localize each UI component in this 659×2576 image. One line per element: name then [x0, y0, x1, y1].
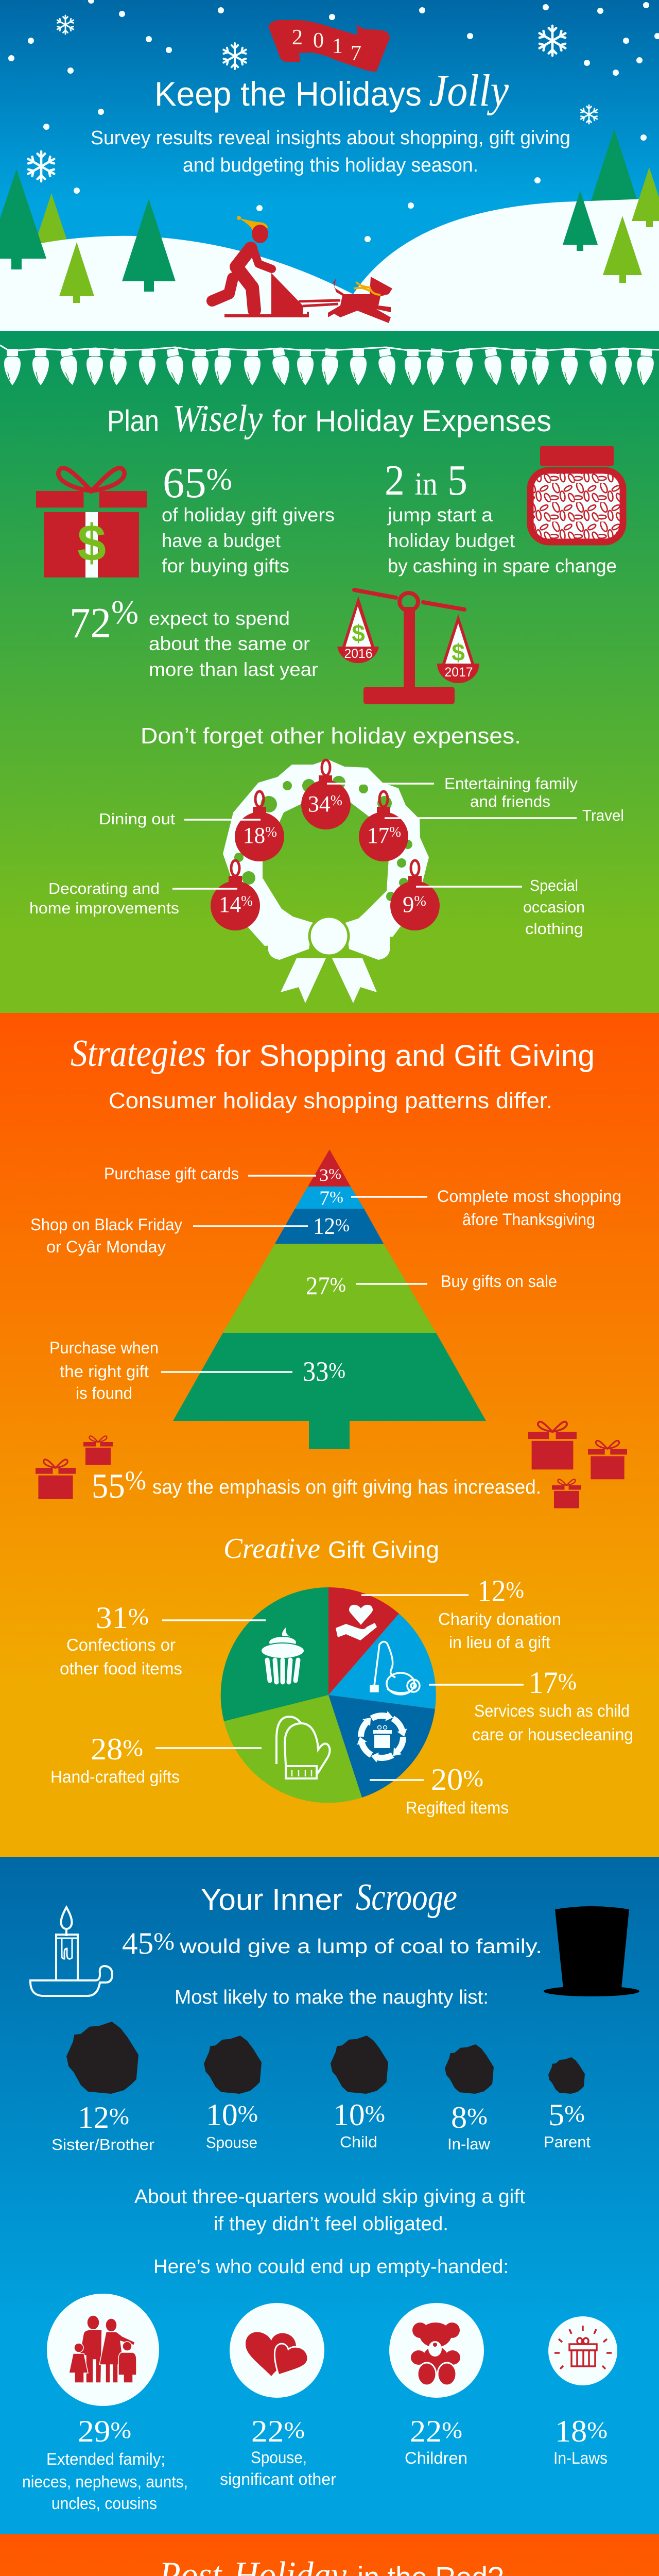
- stat: spouse: 10: [206, 2098, 237, 2132]
- icons: small gifts: [36, 1422, 627, 1508]
- ornament: 14 percent: 14: [219, 892, 241, 917]
- stat: in-law: 8: [451, 2100, 466, 2134]
- stat: 2 in 5: jump start a: [387, 504, 493, 526]
- stat: 72 percent: about the same or: [149, 633, 310, 654]
- label: dining out: Dining out: [99, 810, 175, 828]
- panel: inner scrooge: [0, 1857, 659, 2534]
- wreath bow: [268, 912, 390, 1003]
- label: special occasion: [523, 876, 585, 938]
- label: entertaining: [444, 774, 578, 810]
- icon: coin jar: [530, 446, 623, 542]
- icon: regift recycle ring: [355, 1711, 409, 1762]
- subheading: Don’t forget other holiday expenses.: [141, 723, 521, 749]
- stat: sister brother: Sister/Brother: [51, 2136, 154, 2154]
- ornament: 14 percent: %: [241, 893, 253, 909]
- heading: [201, 1876, 457, 1919]
- stat: extended family: %: [110, 2417, 131, 2443]
- label: 20 percent regifted: [406, 1762, 509, 1817]
- ornament: 18 percent: [235, 791, 284, 861]
- pyramid tree chart: [161, 1149, 486, 1449]
- ornament: 18 percent: %: [265, 824, 277, 840]
- stat: 65 percent have a budget: 65: [163, 459, 206, 507]
- stat: spouse: Spouse: [206, 2133, 257, 2151]
- stat: spouse significant other: Spouse,: [251, 2448, 307, 2467]
- label: complete most shopping before thanksgiving: Complete most shopping: [437, 1187, 621, 1206]
- stat: 45 percent: would give a lump of coal to family.: [179, 1936, 542, 1958]
- heading: [159, 2554, 504, 2576]
- label: 31 percent confections: Confections or: [66, 1635, 176, 1654]
- label: purchase when right gift found: the right gift: [60, 1362, 149, 1381]
- ornament: 14 percent: [211, 860, 260, 930]
- panel: header with sky: [0, 0, 659, 331]
- stat: extended family: nieces, nephews, aunts,: [22, 2472, 188, 2491]
- stat: child: Child: [340, 2133, 377, 2151]
- string of lights: [0, 345, 659, 386]
- stat: 45 percent: [122, 1926, 542, 1960]
- stat: children: Children: [405, 2449, 467, 2467]
- wreath with ornaments: [172, 759, 577, 1003]
- heading: Your Inner: [201, 1883, 342, 1917]
- icon: balance scale 2016 vs 2017: $: [452, 639, 465, 666]
- stat: 72 percent: expect to spend: [149, 608, 290, 629]
- snowy hills: [0, 198, 659, 331]
- pyramid tree chart: %: [330, 1273, 346, 1296]
- stat: in-laws: [553, 2414, 608, 2467]
- label: 17 percent services: care or housecleaning: [472, 1725, 633, 1744]
- subheading: Here’s who could end up empty-handed:: [153, 2256, 509, 2278]
- title: [154, 66, 509, 116]
- pyramid tree chart: %: [330, 1188, 343, 1206]
- icon circle: gift with rays: [548, 2316, 617, 2385]
- label: 12 percent charity: Charity donation: [438, 1609, 561, 1629]
- heading: [107, 398, 551, 440]
- stat: 72 percent: [70, 594, 318, 680]
- label: 17 percent services: [472, 1666, 633, 1744]
- heading: Plan: [107, 404, 159, 438]
- icon: top hat: [544, 1906, 639, 1996]
- label: special occasion: clothing: [525, 920, 583, 938]
- trees on snow: [0, 167, 659, 303]
- coal lumps: [66, 2022, 585, 2094]
- label: 12 percent charity: [438, 1574, 561, 1652]
- icon circle: hearts: [230, 2303, 324, 2398]
- stat: 65 percent have a budget: for buying gifts: [162, 555, 289, 577]
- label: purchase when right gift found: [49, 1338, 159, 1402]
- label: 17 percent services: 17: [529, 1666, 560, 1700]
- ribbon banner with year: 2017: [292, 26, 361, 65]
- label: black friday cyber monday: Shop on Black Friday: [30, 1215, 182, 1234]
- text: three quarters would skip: if they didn’t feel obligated.: [214, 2213, 448, 2235]
- pyramid tree chart: %: [335, 1215, 350, 1235]
- label: special occasion: Special: [530, 876, 578, 894]
- stat: child: [333, 2098, 385, 2151]
- stat: sister brother: 12: [78, 2100, 109, 2134]
- label: 28 percent hand-crafted: %: [123, 1735, 143, 1761]
- heading: creative gift giving: Gift Giving: [328, 1536, 439, 1563]
- icon: gift with dollar: [36, 468, 147, 578]
- stat: spouse significant other: significant other: [220, 2470, 336, 2488]
- label: complete most shopping before thanksgiving: âfore Thanksgiving: [462, 1210, 595, 1229]
- label: purchase gift cards: Purchase gift cards: [104, 1164, 239, 1183]
- pyramid tree chart: 3: [319, 1166, 328, 1185]
- pyramid tree chart: %: [328, 1359, 345, 1383]
- heading: [71, 1032, 595, 1075]
- subheading: Most likely to make the naughty list:: [175, 1987, 489, 2008]
- stat: extended family: [22, 2414, 188, 2513]
- stat: parent: [544, 2098, 591, 2151]
- stat: sister brother: [51, 2100, 154, 2154]
- ribbon banner with year: [268, 20, 390, 72]
- falling snow dots: [8, 0, 659, 242]
- label: 31 percent confections: %: [128, 1603, 149, 1630]
- heading: for Shopping and Gift Giving: [216, 1039, 595, 1073]
- stat: spouse: %: [238, 2100, 258, 2127]
- stat: 65 percent have a budget: [162, 459, 335, 577]
- stat: spouse: [206, 2098, 258, 2151]
- stat: spouse significant other: %: [284, 2417, 305, 2443]
- stat: extended family: Extended family;: [46, 2450, 165, 2468]
- panel: plan wisely: [0, 331, 659, 1013]
- heading: creative gift giving: [223, 1533, 439, 1565]
- ornament: 9 percent: %: [414, 893, 426, 909]
- heading: Wisely: [172, 398, 263, 440]
- sledding figure with dog: [212, 216, 392, 323]
- subtitle: and budgeting this holiday season.: [183, 155, 478, 176]
- label: 31 percent confections: other food items: [60, 1659, 182, 1678]
- stat: spouse significant other: [220, 2414, 336, 2488]
- stat: 55 percent: %: [125, 1466, 146, 1496]
- stat: in-law: In-law: [447, 2135, 491, 2153]
- ornament: 17 percent: 17: [367, 823, 390, 848]
- label: buy gifts on sale: Buy gifts on sale: [441, 1272, 557, 1291]
- label: 12 percent charity: 12: [477, 1574, 508, 1608]
- stat: sister brother: %: [109, 2103, 129, 2129]
- stat: spouse significant other: 22: [251, 2414, 282, 2448]
- stat: child: %: [365, 2100, 385, 2127]
- stat: in-laws: In-Laws: [553, 2449, 608, 2467]
- stat: 65 percent have a budget: %: [206, 462, 232, 496]
- panel: post-holiday: [0, 2534, 659, 2576]
- icon circle: family: [47, 2294, 159, 2406]
- label: 20 percent regifted: 20: [431, 1762, 462, 1797]
- icon: mitten: [276, 1717, 330, 1778]
- label: special occasion: occasion: [523, 898, 585, 916]
- heading: creative gift giving: Creative: [223, 1533, 320, 1565]
- stat: 65 percent have a budget: have a budget: [162, 530, 281, 551]
- label: entertaining: and friends: [470, 792, 550, 810]
- subheading: Consumer holiday shopping patterns differ.: [109, 1088, 552, 1113]
- label: entertaining: Entertaining family: [444, 774, 578, 792]
- pyramid tree chart: 12: [313, 1213, 337, 1239]
- snowflakes: [28, 15, 597, 181]
- label: 12 percent charity: in lieu of a gift: [449, 1633, 550, 1652]
- label: 17 percent services: Services such as child: [474, 1701, 630, 1720]
- stat: child: 10: [333, 2098, 364, 2132]
- label: 28 percent hand-crafted: [50, 1732, 180, 1786]
- icon: gift with dollar: $: [77, 514, 106, 572]
- pyramid tree chart: 33: [303, 1356, 331, 1387]
- stat: 2 in 5: 2 in 5: [385, 456, 467, 504]
- stat: in-laws: 18: [555, 2414, 586, 2448]
- stat: in-law: %: [467, 2103, 488, 2129]
- ornament: 17 percent: %: [389, 824, 401, 840]
- label: purchase when right gift found: Purchase when: [49, 1338, 159, 1357]
- stat: 72 percent: more than last year: [149, 659, 318, 680]
- stat: 55 percent: 55: [92, 1466, 127, 1505]
- ornament: 18 percent: 18: [243, 823, 266, 848]
- icon circle: teddy bear: [389, 2303, 484, 2398]
- pyramid tree chart: %: [328, 1166, 341, 1182]
- label: 28 percent hand-crafted: Hand-crafted gifts: [50, 1767, 180, 1786]
- heading: Scrooge: [356, 1876, 457, 1919]
- ornament: 34 percent: 34: [308, 791, 331, 817]
- label: 28 percent hand-crafted: 28: [91, 1732, 122, 1766]
- stat: children: 22: [410, 2414, 441, 2448]
- stat: children: %: [442, 2417, 462, 2443]
- stat: 65 percent have a budget: of holiday gift givers: [162, 504, 335, 526]
- heading: for Holiday Expenses: [272, 404, 551, 438]
- stat: 45 percent: %: [153, 1928, 175, 1955]
- stat: in-law: [447, 2100, 491, 2153]
- label: travel: Travel: [582, 806, 624, 824]
- stat: extended family: uncles, cousins: [51, 2494, 157, 2513]
- label: 31 percent confections: 31: [96, 1601, 127, 1635]
- icon: vacuum cleaner: [371, 1641, 420, 1694]
- stat: 55 percent: [92, 1466, 541, 1505]
- label: decorating: Decorating and: [48, 879, 160, 897]
- label: 20 percent regifted: Regifted items: [406, 1798, 509, 1817]
- heading: Strategies: [71, 1032, 206, 1075]
- icon: balance scale 2016 vs 2017: [337, 590, 479, 704]
- stat: 72 percent: 72: [70, 599, 113, 647]
- ornament: 34 percent: %: [331, 793, 342, 809]
- ornament: 9 percent: 9: [403, 892, 414, 917]
- stat: children: [405, 2414, 467, 2467]
- ornament: 17 percent: [359, 791, 408, 861]
- icon: cupcake: [261, 1627, 304, 1682]
- label: 17 percent services: %: [558, 1668, 577, 1694]
- icon: balance scale 2016 vs 2017: $: [352, 620, 365, 647]
- pyramid tree chart: 7: [319, 1187, 330, 1210]
- label: 20 percent regifted: %: [463, 1765, 483, 1791]
- label: black friday cyber monday: [30, 1215, 182, 1256]
- stat: 2 in 5: [385, 456, 617, 577]
- ornament: 34 percent: [301, 760, 351, 829]
- label: black friday cyber monday: or Cyâr Monday: [46, 1238, 166, 1256]
- stat: parent: %: [564, 2100, 585, 2127]
- label: decorating: home improvements: [29, 899, 179, 917]
- stat: 45 percent: 45: [122, 1926, 153, 1960]
- text: three quarters would skip: [134, 2186, 525, 2235]
- ornament: 9 percent: [390, 860, 440, 930]
- label: decorating: [29, 879, 179, 917]
- stat: parent: Parent: [544, 2133, 591, 2151]
- icon: balance scale 2016 vs 2017: 2016: [344, 647, 373, 661]
- pie chart: creative gifts: [155, 1587, 524, 1803]
- label: 31 percent confections: [60, 1601, 182, 1678]
- pyramid tree chart: 27: [306, 1271, 332, 1300]
- text: three quarters would skip: About three-quarters would skip giving a gift: [134, 2186, 525, 2208]
- label: complete most shopping before thanksgiving: [437, 1187, 621, 1229]
- subtitle: [91, 127, 570, 176]
- label: purchase when right gift found: is found: [76, 1384, 132, 1402]
- trees behind snow: [33, 129, 659, 255]
- icon: balance scale 2016 vs 2017: 2017: [445, 665, 473, 680]
- icon: heart in hand: [336, 1605, 377, 1640]
- icon: candle: [30, 1907, 112, 1996]
- panel: strategies: [0, 1013, 659, 1857]
- stat: in-laws: %: [587, 2417, 608, 2443]
- stat: 2 in 5: by cashing in spare change: [388, 555, 617, 577]
- title: Jolly: [429, 66, 509, 116]
- label: 12 percent charity: %: [506, 1577, 524, 1603]
- stat: parent: 5: [548, 2098, 564, 2132]
- title: Keep the Holidays: [154, 75, 422, 113]
- stat: 72 percent: %: [111, 594, 138, 631]
- stat: extended family: 29: [78, 2414, 109, 2448]
- subtitle: Survey results reveal insights about shopping, gift giving: [91, 127, 570, 149]
- stat: 2 in 5: holiday budget: [388, 530, 515, 551]
- stat: 55 percent: say the emphasis on gift giving has increased.: [152, 1477, 541, 1498]
